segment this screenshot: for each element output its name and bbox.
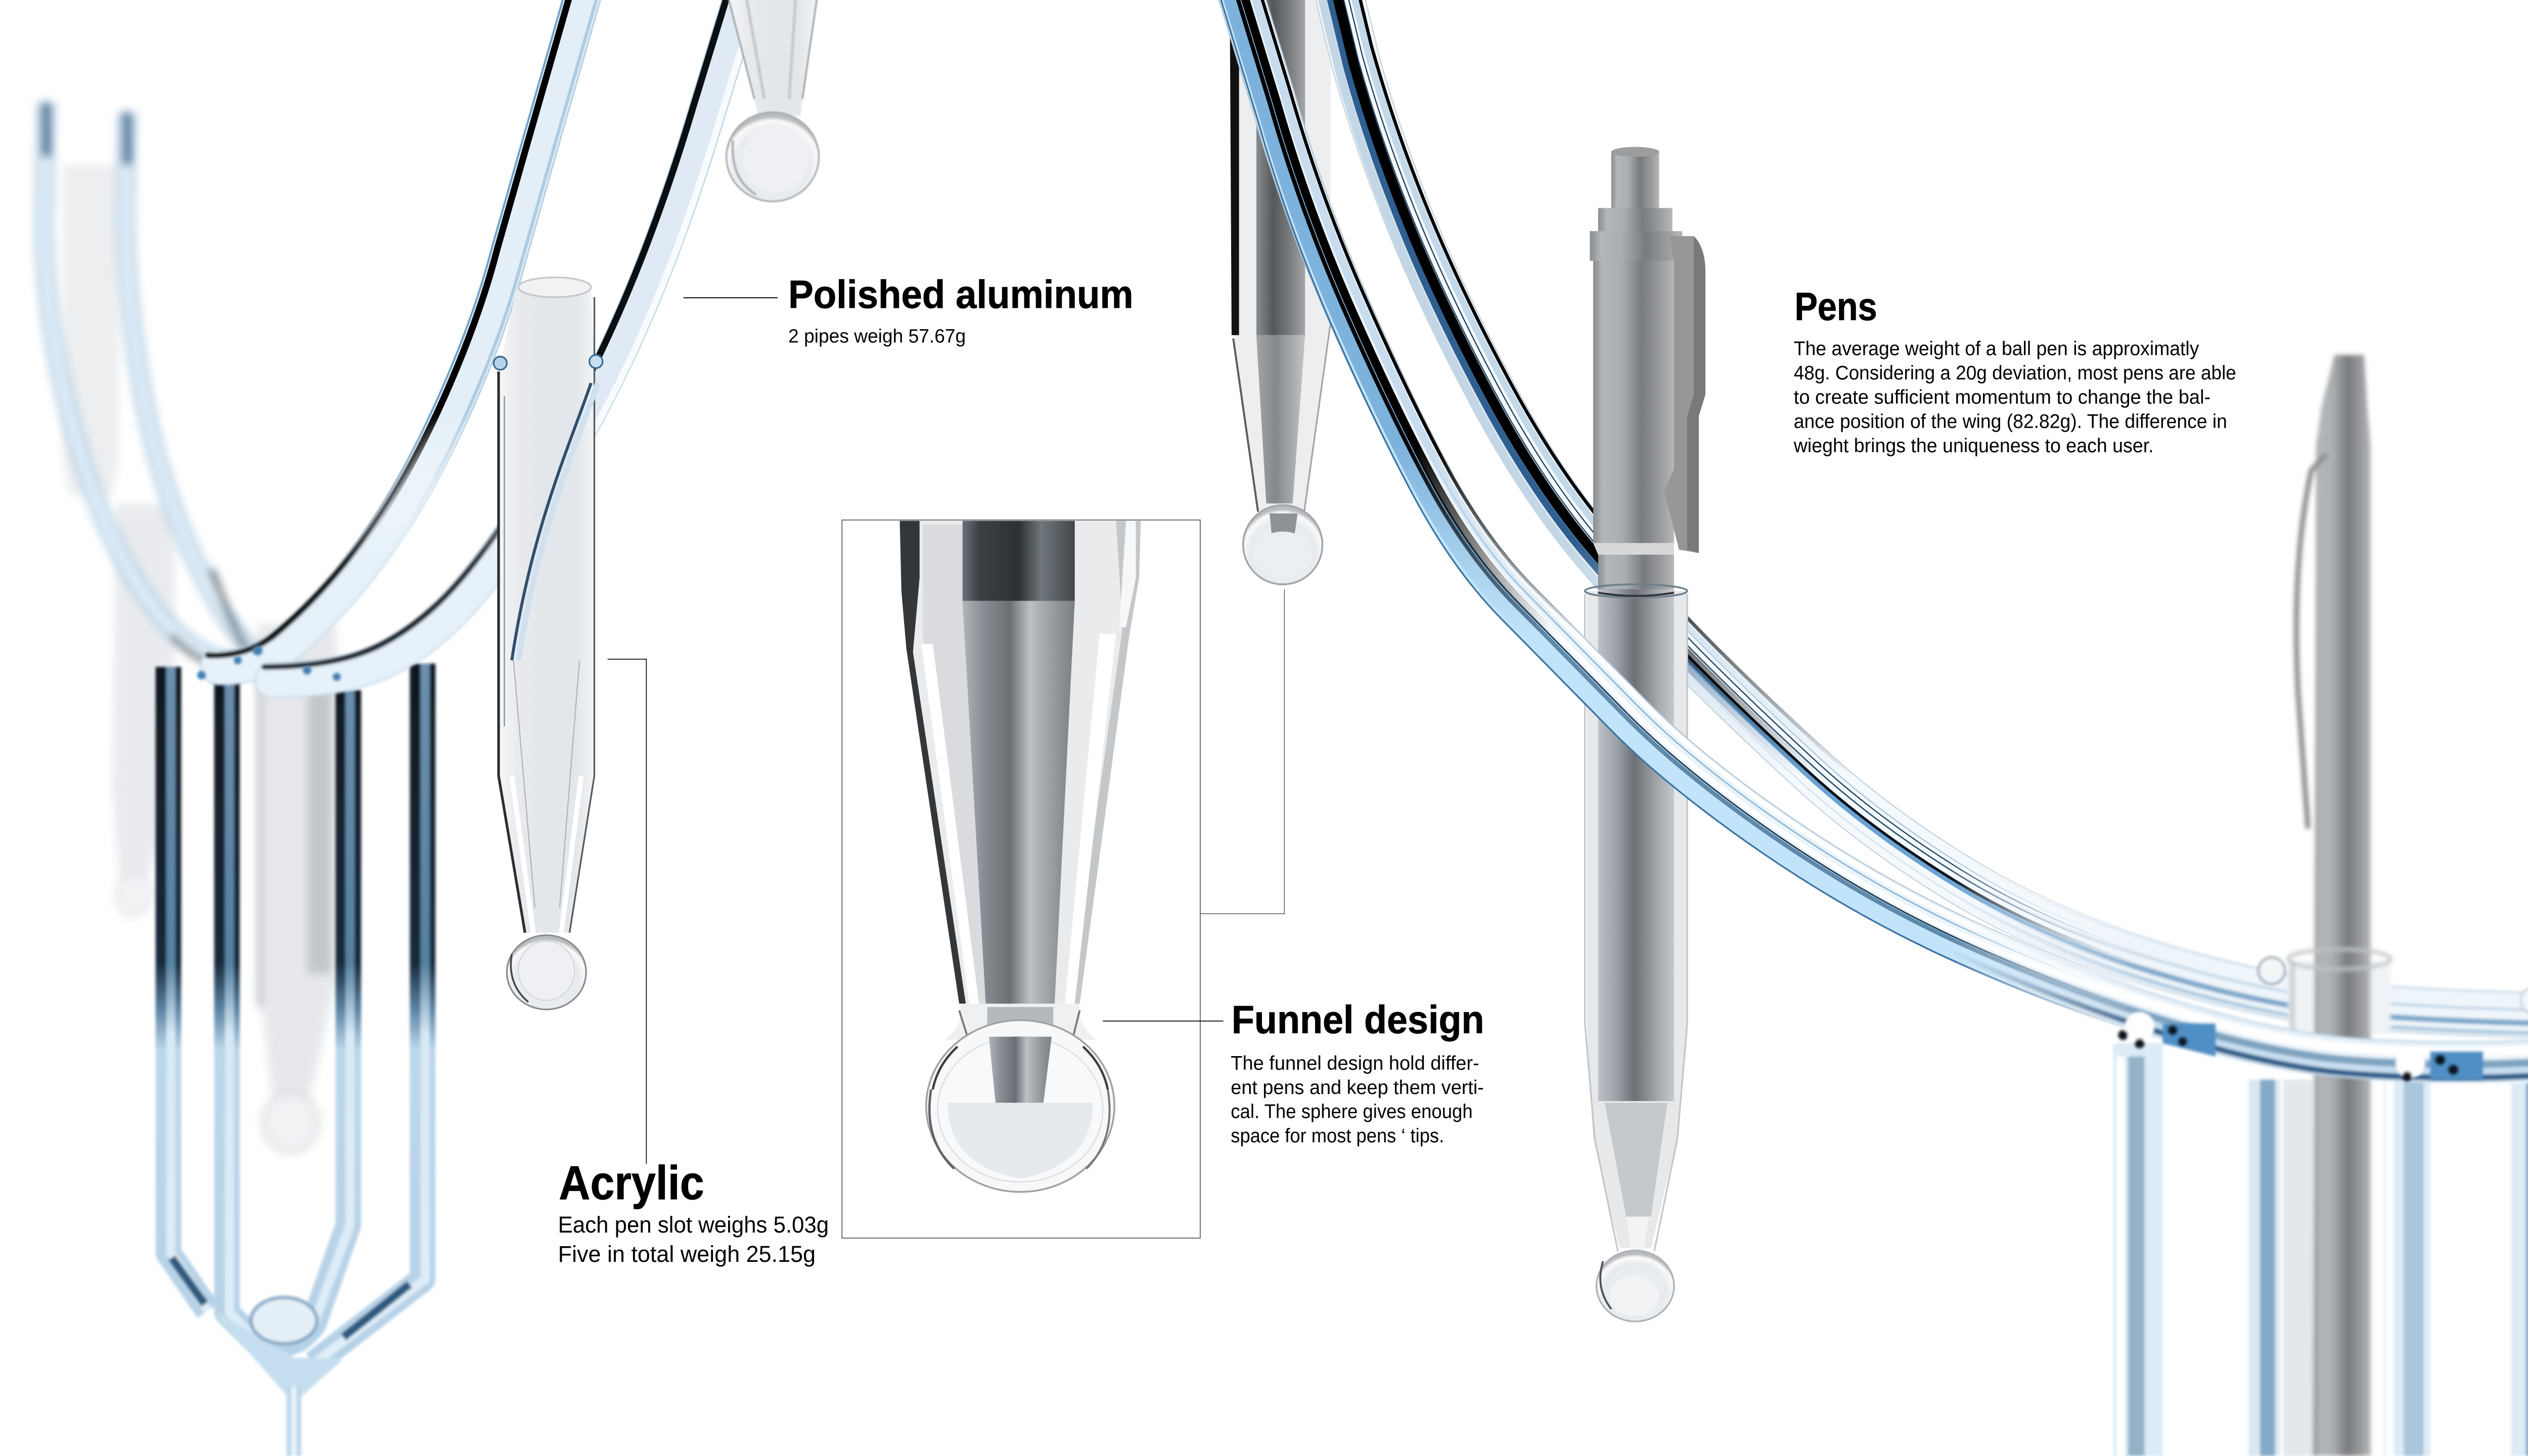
right stand vertical rails (2113, 1043, 2528, 1456)
text block: acrylic: Five in total weigh 25.15g (558, 1241, 816, 1267)
heading: polished aluminum (788, 272, 1134, 347)
funnel sphere (926, 1020, 1114, 1192)
text block: acrylic: Acrylic (559, 1156, 704, 1210)
text block: pens: 48g. Considering a 20g deviation, most pens are able (1794, 362, 2236, 384)
pen button (1611, 152, 1659, 208)
funnel pen tip (989, 1037, 1052, 1103)
slot outlines (1585, 595, 1687, 1251)
funnel inner pen dark (963, 521, 1075, 601)
right slot junction beads and dark spots (2118, 958, 2528, 1081)
right acrylic slot with blurred pen (2288, 355, 2390, 1456)
left stand vertical rails (168, 657, 425, 1456)
aluminum arc front, right side (1213, 0, 2528, 1078)
text block: pens (1793, 284, 2236, 457)
text block: acrylic (558, 1156, 829, 1267)
aluminum arc rear, right side (1315, 0, 2114, 977)
funnel left dark edge (900, 521, 966, 1004)
pen tip (1605, 1103, 1667, 1217)
main acrylic pen slot (493, 278, 603, 1010)
slot rim (1585, 584, 1687, 598)
heading: polished aluminum: Polished aluminum (788, 272, 1134, 316)
aluminum arc rear, upper dark reflection (1318, 0, 1845, 768)
upper pen barrel (1593, 259, 1674, 543)
text block: funnel design: cal. The sphere gives enough (1231, 1101, 1473, 1123)
leader line: funnel design (1103, 1021, 1224, 1022)
aluminum arc front, far right blurred (1230, 0, 2528, 1077)
text block: pens: The average weight of a ball pen is approximatly (1794, 338, 2199, 360)
joint details of left pipes (197, 646, 341, 681)
funnel neck (944, 1004, 1096, 1040)
acrylic slot body (1587, 591, 1687, 1248)
text block: funnel design (1231, 997, 1484, 1147)
funnel right strips (1070, 521, 1141, 1004)
pen barrel in slot (1598, 589, 1674, 1101)
centre top acrylic slot with pen (1230, 0, 1331, 584)
text block: funnel design: Funnel design (1232, 997, 1484, 1041)
aluminum arc front, upper dark reflection (1221, 0, 2528, 1071)
text block: pens: ance position of the wing (82.82g). The difference in (1794, 411, 2227, 433)
pen clip (1664, 236, 1705, 553)
aluminum arc rear, far right blurred (1331, 0, 2528, 1035)
blurred background slots (63, 165, 337, 1152)
blurred rear pipes (44, 102, 330, 680)
main pen in acrylic slot (1585, 147, 1705, 1322)
funnel left white strip (923, 525, 990, 1010)
top acrylic slot with ball (727, 0, 819, 201)
heading: polished aluminum: 2 pipes weigh 57.67g (788, 326, 966, 347)
funnel inner pen lighter (963, 601, 1075, 1030)
text block: funnel design: space for most pens ‘ tips. (1231, 1125, 1444, 1147)
text block: acrylic: Each pen slot weighs 5.03g (558, 1212, 829, 1238)
funnel inset frame (842, 520, 1200, 1238)
text block: funnel design: The funnel design hold differ- (1231, 1053, 1479, 1074)
funnel glass body (900, 521, 1141, 1004)
text block: pens: Pens (1794, 284, 1877, 329)
leader line: acrylic (608, 659, 646, 1164)
leader line: polished aluminum (684, 297, 778, 298)
funnel sphere reflections (929, 1089, 954, 1169)
polished aluminum pipes left, upper (352, 0, 743, 549)
polished aluminum pipes left, lower blurred (198, 418, 498, 699)
text block: funnel design: ent pens and keep them verti- (1231, 1077, 1484, 1099)
text block: pens: to create sufficient momentum to change the bal- (1794, 386, 2210, 408)
leader line: inset connector (1200, 589, 1284, 914)
text block: pens: wieght brings the uniqueness to each user. (1793, 435, 2154, 457)
